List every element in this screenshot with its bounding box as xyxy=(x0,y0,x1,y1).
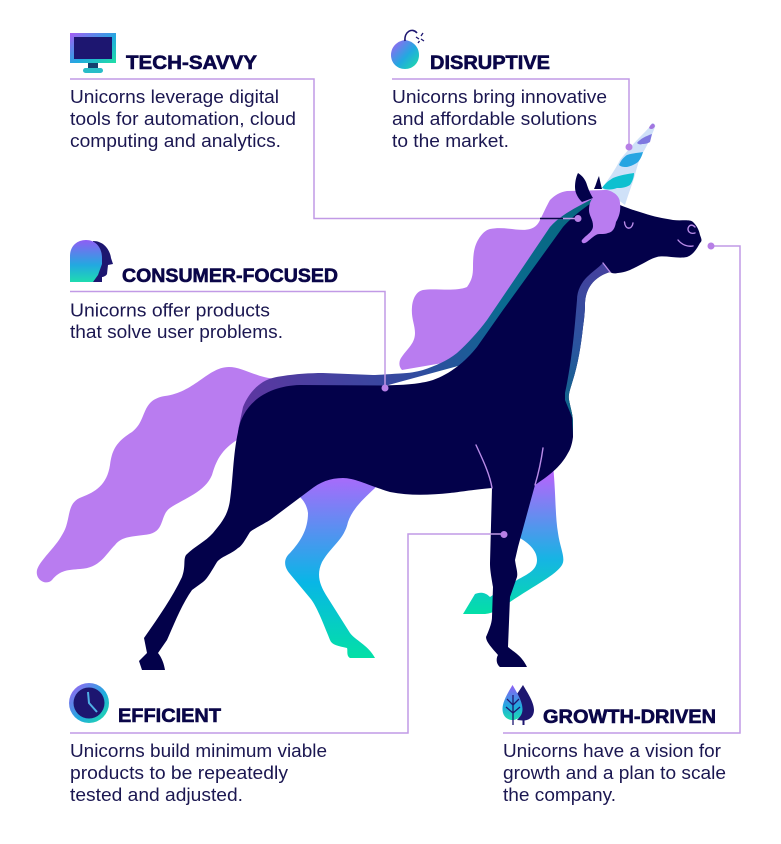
heading: EFFICIENT xyxy=(118,706,221,727)
text block: growth and a plan to scale xyxy=(503,762,726,783)
front neck stripe xyxy=(565,263,610,437)
text block: that solve user problems. xyxy=(70,321,283,342)
icon: trees xyxy=(502,685,534,725)
hind leg xyxy=(285,470,385,658)
text block: Unicorns bring innovative xyxy=(392,86,607,107)
body xyxy=(139,202,702,670)
heading: CONSUMER-FOCUSED xyxy=(122,266,338,287)
text block: computing and analytics. xyxy=(70,130,281,151)
icon: heads xyxy=(70,240,113,282)
text block: tested and adjusted. xyxy=(70,784,243,805)
callout line: disruptive xyxy=(392,79,632,150)
panel: growth-driven xyxy=(502,685,726,805)
callout line: consumer-focused xyxy=(70,292,388,392)
raised front leg xyxy=(463,465,563,614)
back and neck stripe xyxy=(238,199,596,432)
tail xyxy=(37,367,285,582)
unicorn illustration xyxy=(37,123,701,670)
text block xyxy=(392,86,607,151)
heading: GROWTH-DRIVEN xyxy=(543,707,716,728)
text block xyxy=(70,86,296,151)
callout line: tech-savvy xyxy=(70,79,582,222)
icon: bomb xyxy=(391,30,424,69)
ears xyxy=(575,173,602,202)
heading: DISRUPTIVE xyxy=(430,53,550,74)
text block: Unicorns offer products xyxy=(70,300,270,320)
text block xyxy=(503,740,726,805)
text block: products to be repeatedly xyxy=(70,762,289,783)
text block xyxy=(70,300,283,342)
heading: TECH-SAVVY xyxy=(126,53,257,74)
callout line: growth-driven xyxy=(503,242,740,733)
text block: to the market. xyxy=(392,130,509,151)
panel: efficient xyxy=(69,683,327,805)
forelock xyxy=(582,190,620,243)
icon: monitor xyxy=(70,33,116,73)
mane xyxy=(399,190,607,370)
panel: consumer-focused xyxy=(70,240,338,342)
text block xyxy=(70,740,327,805)
text block: the company. xyxy=(503,784,616,805)
icon: clock xyxy=(69,683,109,723)
horn xyxy=(602,123,655,205)
text block: tools for automation, cloud xyxy=(70,108,296,129)
text block: Unicorns build minimum viable xyxy=(70,740,327,761)
panel: disruptive xyxy=(391,30,607,151)
callout line: efficient xyxy=(70,531,508,733)
text block: and affordable solutions xyxy=(392,108,597,129)
text block: Unicorns leverage digital xyxy=(70,86,279,107)
face details xyxy=(476,222,695,488)
panel: tech-savvy xyxy=(70,33,296,151)
text block: Unicorns have a vision for xyxy=(503,740,721,761)
